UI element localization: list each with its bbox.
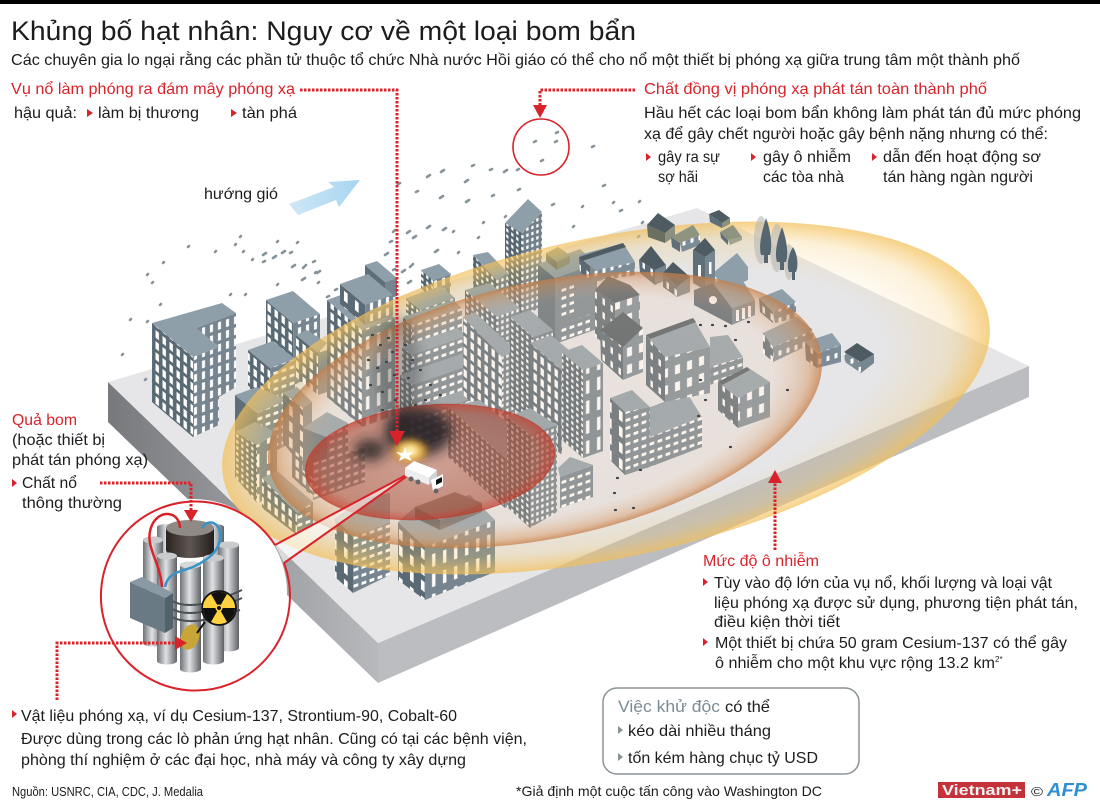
houses and church [579,210,874,428]
callout: radioactive material: phòng thí nghiệm ở các đại học, nhà máy và công ty xây dựng [21,752,466,769]
arrow: wind direction [289,180,360,215]
callout: isotope spread: Hầu hết các loại bom bẩn không làm phát tán đủ mức phóng [644,104,1081,122]
icon: trees [754,216,797,280]
callout: contamination level: Một thiết bị chứa 50 gram Cesium-137 có thể gây [715,634,1067,652]
contamination zone: outer rim over left city [222,230,640,574]
arrow: explosive pointer [100,483,198,522]
icon: radiation symbol [197,591,236,633]
panel: decontamination box [603,688,859,774]
source note: Nguồn: USNRC, CIA, CDC, J. Medalia [12,785,203,799]
panel: decontamination box: có thể [725,698,770,716]
city buildings: high-rises right of centre [463,252,603,458]
callout: radioactive material [12,708,527,769]
city buildings: back left [248,291,327,405]
city buildings: tall central-left block [327,261,397,427]
smoke column [354,315,452,461]
callout: contamination level: điều kiện thời tiết [714,614,841,631]
panel: bomb zoom wedge [275,473,410,563]
city buildings: two front blocks [335,492,495,600]
contamination zone: inner blast ring [301,394,559,530]
callout: isotope spread: gây ra sự [658,149,720,166]
footnote: *Giả định một cuộc tấn công vào Washington DC [516,783,822,799]
callout: the bomb: Chất nổ [22,474,77,492]
callout: explosion cloud: tàn phá [242,105,297,122]
callout: the bomb [12,412,148,512]
callout: explosion cloud [11,80,297,122]
callout: contamination level: ô nhiễm cho một khu vực rộng 13.2 km [715,653,995,672]
arrow: radioactive material pointer [57,636,187,700]
callout: isotope spread: dẫn đến hoạt động sơ [883,147,1042,166]
city buildings: block with olive roof box [538,247,597,344]
subtitle: Các chuyên gia lo ngại rằng các phần tử thuộc tổ chức Nhà nước Hồi giáo có thể cho nổ một thiết bị phóng xạ giữa trung tâm một thành phố [11,50,1020,69]
callout: radioactive material: Vật liệu phóng xạ, ví dụ Cesium-137, Strontium-90, Cobalt-60 [21,708,457,725]
debris cloud [122,132,643,380]
logo: Vietnam+ and AFP: AFP [1046,780,1088,800]
callout: isotope spread: xạ để gây chết người hoặc gây bệnh nặng nhưng có thể: [644,125,1048,143]
contamination zone: outer rim, right part [640,222,990,554]
callout: the bomb: phát tán phóng xạ) [12,452,148,469]
city buildings: right block near ring edge [610,390,702,475]
callout: isotope spread: Chất đồng vị phóng xạ phát tán toàn thành phố [644,81,987,98]
callout: contamination level [703,551,1078,672]
panel: decontamination box: kéo dài nhiều tháng [628,723,771,740]
title: Khủng bố hạt nhân: Nguy cơ về một loại bom bẩn [11,16,636,46]
far-left L-shaped tower [152,303,236,437]
panel: city platform [108,208,1029,683]
callout: contamination level: Mức độ ô nhiễm [703,551,819,570]
explosion flash [390,437,430,465]
callout: explosion cloud: làm bị thương [98,105,199,122]
logo: Vietnam+ and AFP [938,780,1088,800]
panel: decontamination box: Việc khử độc [618,698,720,716]
callout: isotope spread: các tòa nhà [763,169,844,186]
callout: explosion cloud: Vụ nổ làm phóng ra đám mây phóng xạ [11,80,295,98]
arrow: explosion pointer [300,90,405,446]
icon: bands [170,590,242,621]
callout: isotope spread [644,81,1081,186]
callout: the bomb: Quả bom [12,412,77,429]
icon: control box [130,577,173,633]
panel: decontamination box: tốn kém hàng chục tỷ USD [628,750,818,767]
city buildings: stepped centre block [400,264,485,450]
callout: isotope spread: gây ô nhiễm [763,147,851,166]
icon: bomb cylinders [143,520,239,673]
city buildings: central dense blocks in blast zone [448,400,557,528]
contamination zone: middle ring [243,226,847,594]
city buildings: lower-left cluster [235,387,365,535]
arrow: contamination pointer [768,470,782,550]
city buildings: back centre tower with spire [505,199,542,320]
callout: contamination level: Tùy vào độ lớn của vụ nổ, khối lượng và loại vật [714,574,1053,592]
panel: bomb detail circle [99,499,290,691]
callout: isotope spread: tán hàng ngàn người [883,169,1033,186]
logo: Vietnam+ and AFP: © [1031,784,1044,799]
icon: radioactive material capsule [177,622,203,652]
debris over buildings [368,322,788,510]
arrow: isotope pointer with circle [513,90,635,175]
callout: explosion cloud: hậu quả: [14,105,77,122]
city buildings: low box [558,457,593,508]
icon: wires [149,514,220,587]
callout: contamination level: liệu phóng xạ được sử dụng, phương tiện phát tán, [714,595,1078,612]
icon: truck [405,461,443,494]
callout: the bomb: (hoặc thiết bị [12,432,105,449]
wind direction label: hướng gió [204,186,278,203]
callout: radioactive material: Được dùng trong các lò phản ứng hạt nhân. Cũng có tại các bệnh viện, [21,731,527,748]
logo: Vietnam+ and AFP: Vietnam+ [942,783,1022,799]
callout: the bomb: thông thường [22,495,122,512]
callout: isotope spread: sợ hãi [658,169,698,186]
callout: contamination level: 2* [995,655,1003,664]
